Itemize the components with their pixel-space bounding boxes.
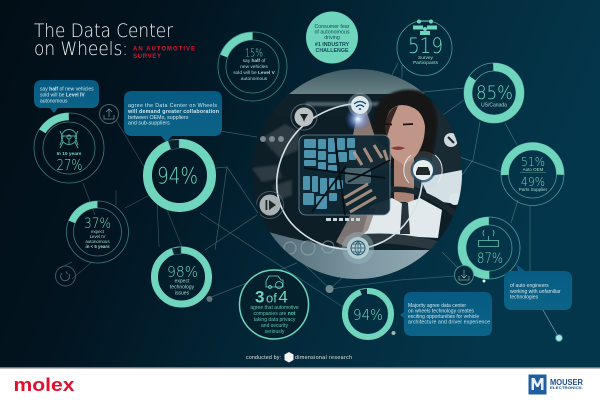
callout: majority agree: Majority agree data center bbox=[408, 303, 466, 309]
donut: 15% level V bbox=[213, 27, 292, 106]
central photo: driver with touch interface bbox=[250, 66, 470, 285]
callout: unfamiliar technologies: working with unfamiliar bbox=[510, 289, 561, 295]
hair bbox=[374, 90, 437, 168]
donut: 85% US/Canada: 85% bbox=[476, 82, 513, 104]
network connector lines bbox=[60, 63, 559, 338]
callout: majority agree: architecture and driver experience bbox=[408, 320, 490, 326]
callout: half level IV: autonomous bbox=[40, 98, 68, 104]
title: on Wheels: bbox=[34, 38, 128, 60]
callout: half level IV: say half of new vehicles bbox=[40, 86, 94, 92]
eyes and lips bbox=[383, 123, 413, 126]
donut: 51% auto OEM, 49% parts supplier: 51% bbox=[521, 154, 545, 169]
cabin right side bbox=[432, 101, 462, 175]
donut: 51% auto OEM, 49% parts supplier: Auto OEM bbox=[523, 167, 544, 172]
callout: unfamiliar technologies bbox=[504, 264, 572, 310]
shirt bbox=[362, 198, 442, 238]
callout: majority agree bbox=[400, 292, 492, 336]
steering wheel bbox=[390, 186, 455, 216]
logo: Mouser Electronics: ELECTRONICS. bbox=[550, 386, 583, 390]
white shoulder bbox=[420, 170, 462, 205]
callout: majority agree: exciting opportunities for vehicle bbox=[408, 314, 479, 320]
donut: 37% level IV: autonomous bbox=[85, 239, 110, 244]
logo: molex bbox=[0, 368, 600, 400]
icon: steering wheel and hands bbox=[60, 130, 78, 148]
callout: collaboration: will demand greater collaboration bbox=[127, 109, 219, 115]
credit: conducted by dimensional research: dimensional research bbox=[295, 355, 352, 361]
donut: 15% level V: say half of bbox=[243, 59, 265, 64]
map tile bbox=[299, 135, 390, 215]
callout: half level IV bbox=[34, 80, 99, 113]
donut: 94% collaboration: 94% bbox=[157, 164, 198, 190]
logo: molex: molex bbox=[14, 374, 75, 395]
donut: 37% level IV: 37% bbox=[84, 216, 111, 232]
callout: majority agree: on wheels technology creates bbox=[408, 309, 474, 315]
stat: 519 survey participants: Participants bbox=[413, 60, 439, 66]
donut: 27% in 10 years: 27% bbox=[56, 156, 82, 174]
node: play bbox=[256, 192, 284, 218]
title: The Data Center bbox=[34, 20, 173, 42]
wifi flare bbox=[346, 109, 370, 131]
donut: 94% new opportunities bbox=[345, 288, 391, 337]
street seen through windscreen bbox=[287, 69, 426, 96]
donut: 51% auto OEM, 49% parts supplier bbox=[501, 142, 564, 206]
stat: 519 survey participants bbox=[397, 20, 452, 76]
node: location pin bbox=[291, 104, 317, 130]
donut: 85% US/Canada: US/Canada bbox=[481, 102, 507, 108]
badge: consumer fear: driving bbox=[324, 35, 340, 41]
callout: unfamiliar technologies: technologies bbox=[510, 294, 539, 300]
donut: 37% level IV: expect bbox=[91, 229, 105, 234]
small bottom rings bbox=[284, 241, 334, 255]
badge: 3 of 4: and security bbox=[261, 323, 288, 329]
badge: consumer fear: CHALLENGE bbox=[316, 48, 349, 54]
dot markers bbox=[206, 280, 562, 342]
donut: 94% new opportunities: 94% bbox=[353, 306, 383, 324]
donut: 98% technology issues: issues bbox=[175, 290, 190, 296]
logo: Mouser Electronics bbox=[528, 374, 583, 394]
donut: 15% level V: new vehicles bbox=[240, 64, 268, 70]
donut: 15% level V: autonomous bbox=[241, 76, 268, 82]
tile hand overlay bbox=[344, 145, 388, 212]
subtitle: AN AUTOMOTIVE bbox=[133, 46, 195, 52]
subtitle bbox=[133, 46, 195, 60]
raised finger bbox=[353, 112, 392, 167]
donut: 37% level IV: in < 5 years bbox=[85, 244, 110, 249]
donut: 85% US/Canada bbox=[464, 63, 524, 123]
badge: 3 of 4: 3of4 bbox=[255, 288, 288, 306]
icon: download bbox=[454, 266, 474, 284]
badge: 3 of 4: seriously bbox=[265, 329, 285, 335]
node: right bbox=[450, 195, 460, 205]
badge: 3 of 4 bbox=[240, 270, 308, 339]
stat: 519 survey participants: Survey bbox=[418, 55, 434, 61]
donut: 15% level V: 15% bbox=[245, 46, 263, 60]
donut: 87%: 87% bbox=[477, 251, 503, 267]
donut: 87% bbox=[458, 217, 520, 279]
icon: router bbox=[478, 230, 498, 246]
callout: collaboration: between OEMs, suppliers bbox=[128, 115, 189, 121]
donut: 51% auto OEM, 49% parts supplier: Parts Supplier bbox=[519, 187, 548, 192]
icon: refresh bbox=[56, 266, 76, 286]
callout: collaboration bbox=[124, 91, 222, 142]
badge: 3 of 4: taking data privacy bbox=[254, 317, 296, 323]
donut: 27% in 10 years: In 10 years bbox=[57, 151, 82, 157]
node: car bbox=[404, 151, 442, 189]
dashboard bbox=[270, 232, 430, 279]
donut: 27% in 10 years bbox=[26, 105, 112, 191]
title bbox=[34, 20, 173, 60]
node: globe bbox=[342, 232, 374, 264]
badge: 3 of 4: companies are not bbox=[254, 311, 295, 317]
badge: consumer fear: Consumer fear bbox=[314, 24, 350, 30]
donut: 98% technology issues bbox=[154, 247, 208, 304]
stat: 519 survey participants: 519 bbox=[408, 34, 443, 58]
icon: people at table bbox=[413, 20, 437, 35]
donut: 51% auto OEM, 49% parts supplier: 49% bbox=[521, 174, 545, 189]
callout: unfamiliar technologies: of auto engineers bbox=[510, 283, 549, 289]
world map bbox=[252, 124, 300, 200]
donut: 37% level IV: Level IV bbox=[90, 234, 105, 239]
donut: 98% technology issues: technology bbox=[170, 284, 195, 290]
callout: half level IV: sold will be Level IV bbox=[40, 92, 85, 98]
badge: consumer fear bbox=[306, 12, 358, 64]
icon: car with lock bbox=[266, 276, 283, 288]
callout: collaboration: and sub-suppliers bbox=[128, 120, 170, 126]
arm and hand bbox=[336, 215, 374, 248]
credit: conducted by dimensional research bbox=[246, 352, 352, 362]
badge: consumer fear: of autonomous bbox=[314, 30, 350, 36]
badge: 3 of 4: agree that automotive bbox=[250, 305, 299, 311]
subtitle: SURVEY bbox=[133, 54, 161, 60]
node: tool icon bbox=[444, 133, 458, 147]
callout: collaboration: agree the Data Center on Wheels bbox=[128, 103, 217, 109]
donut: 98% technology issues: 98% bbox=[167, 263, 198, 281]
node: wifi bbox=[348, 93, 372, 117]
icon: upload bbox=[100, 104, 118, 124]
interface arc bbox=[277, 104, 423, 249]
logo: Mouser Electronics: MOUSER bbox=[550, 378, 583, 387]
small icon row under tile bbox=[326, 218, 360, 221]
donut: 98% technology issues: expect bbox=[175, 278, 190, 284]
credit: conducted by dimensional research: conducted by: bbox=[246, 355, 281, 361]
donut: 94% collaboration bbox=[148, 140, 212, 208]
neck bbox=[394, 158, 414, 202]
face bbox=[386, 105, 425, 165]
donut: 15% level V: sold will be Level V bbox=[233, 71, 275, 76]
badge: consumer fear: #1 INDUSTRY bbox=[315, 42, 350, 48]
donut: 37% level IV bbox=[62, 196, 133, 268]
